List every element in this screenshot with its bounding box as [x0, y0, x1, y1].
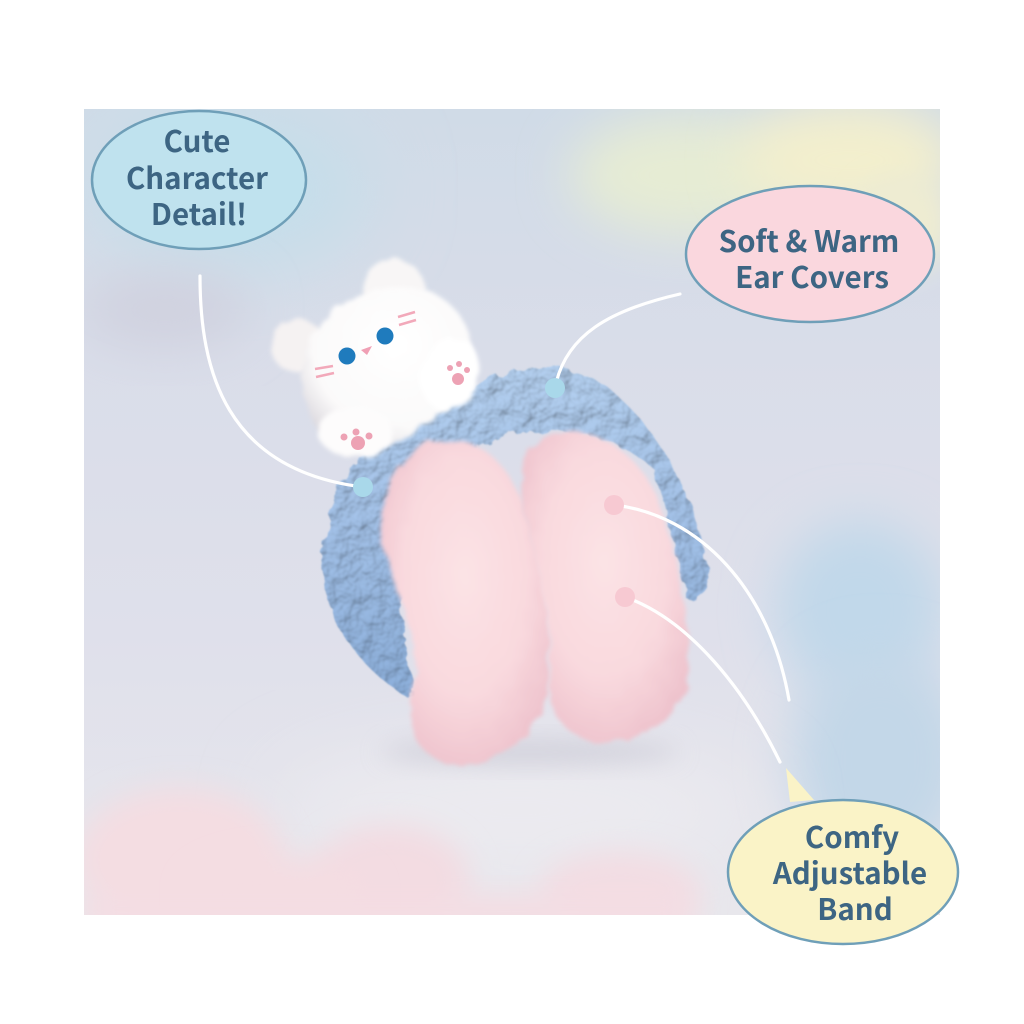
cat body: [302, 287, 474, 455]
callout: cute character detail: Detail!: [151, 192, 247, 234]
callout: soft and warm ear covers: [686, 186, 934, 322]
callout: cute character detail: Cute: [164, 119, 230, 161]
callout: comfy adjustable band: Comfy: [805, 815, 899, 857]
callout: comfy adjustable band: Band: [817, 887, 893, 929]
panel: photo background: [75, 100, 970, 935]
callout: soft and warm ear covers: Ear Covers: [735, 255, 889, 297]
blue fuzzy headband: [322, 367, 707, 698]
callout: cute character detail: [92, 111, 306, 249]
left pink ear cover: [381, 440, 549, 765]
callout tail: [786, 768, 814, 802]
white cat plush: [271, 259, 489, 457]
leader dots: [353, 378, 635, 607]
cat eyes: [338, 348, 356, 364]
right pink ear cover: [520, 432, 689, 742]
product shadow: [380, 738, 680, 766]
cat front paw: [411, 331, 489, 417]
cat ears: [363, 259, 425, 321]
leader line: lower band: [625, 597, 780, 762]
callout: soft and warm ear covers: Soft & Warm: [719, 219, 899, 261]
cat paw pads: [340, 361, 470, 450]
callout: comfy adjustable band: [728, 768, 958, 944]
cat nose: [361, 346, 372, 355]
leader line: upper band: [614, 505, 789, 700]
callout: cute character detail: Character: [126, 156, 268, 198]
leader line: ear covers: [555, 294, 680, 388]
cat whiskers: [315, 312, 416, 377]
callout lines: [200, 276, 789, 762]
cat lower paw: [318, 407, 394, 457]
leader line: cute character: [200, 276, 363, 487]
callout: comfy adjustable band: Adjustable: [772, 851, 927, 893]
earmuff product photo: [271, 259, 707, 766]
